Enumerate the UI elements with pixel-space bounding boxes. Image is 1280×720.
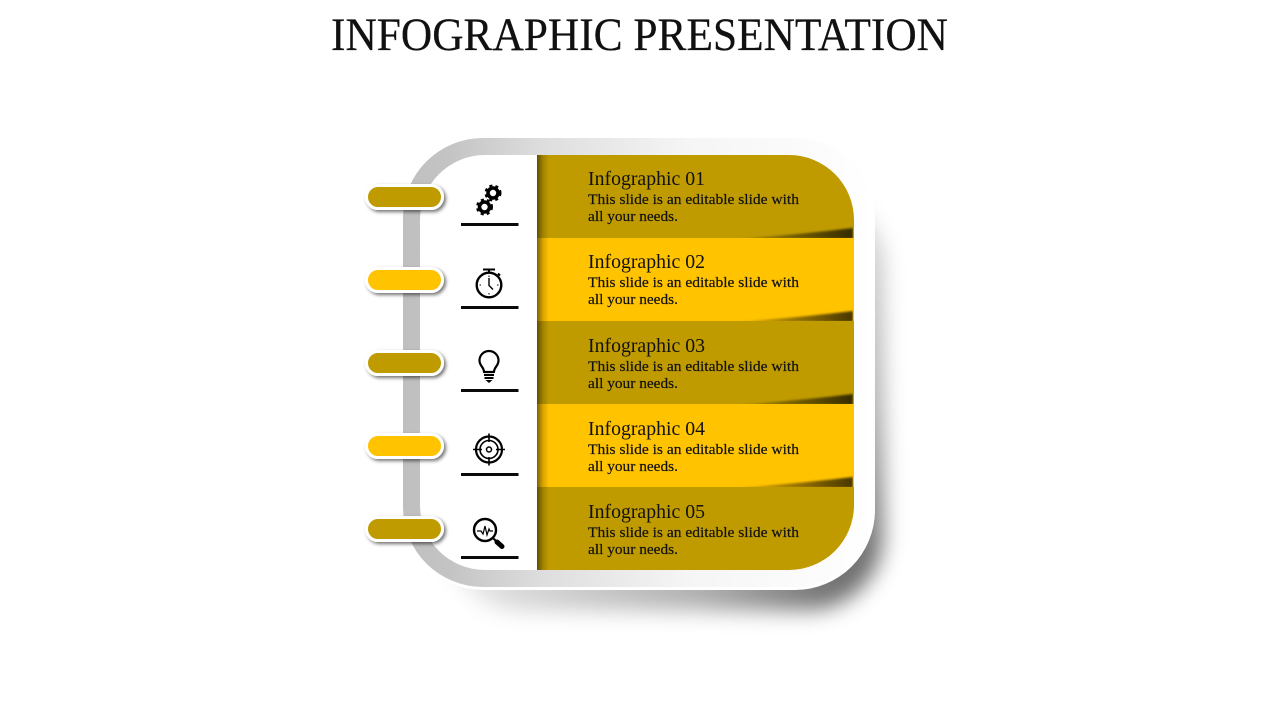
outer frame [403,138,875,590]
band 5: This slide is an editable slide with [588,525,800,541]
band 3: all your needs. [588,376,678,392]
underline 1 [461,223,518,226]
band 2: all your needs. [588,292,678,308]
title: INFOGRAPHIC PRESENTATION [331,9,948,61]
band 1: all your needs. [588,209,678,225]
band 5 [537,487,854,570]
band 2: Infographic 02 [588,251,705,273]
icon: target [473,434,505,466]
band 2: This slide is an editable slide with [588,275,800,291]
panel shadow [445,190,883,610]
pill tab 4 [366,434,442,458]
band 4: Infographic 04 [588,418,705,440]
band 4: This slide is an editable slide with [588,442,800,458]
icon: gears [477,186,500,214]
band 3: Infographic 03 [588,335,705,357]
underline 4 [461,473,518,476]
icon: light bulb [480,351,498,383]
underline 2 [461,306,518,309]
band 4 [537,404,854,488]
band 5: Infographic 05 [588,501,705,523]
band 1 [537,155,854,239]
icon: magnifier with pulse [474,519,502,546]
band 1: Infographic 01 [588,168,705,190]
pill tab 2 [366,268,442,292]
band 3: This slide is an editable slide with [588,359,800,375]
band 4: all your needs. [588,459,678,475]
icon: stopwatch [477,270,501,297]
notebook panel [403,138,883,610]
band 5: all your needs. [588,542,678,558]
underline 3 [461,389,518,392]
pill tab 5 [366,518,442,540]
band 1: This slide is an editable slide with [588,192,800,208]
pill tab 3 [366,352,442,374]
underline 5 [461,556,518,559]
pill tab 1 [366,186,442,208]
band 3 [537,321,854,405]
band 2 [537,238,854,322]
white icon column [420,155,537,570]
